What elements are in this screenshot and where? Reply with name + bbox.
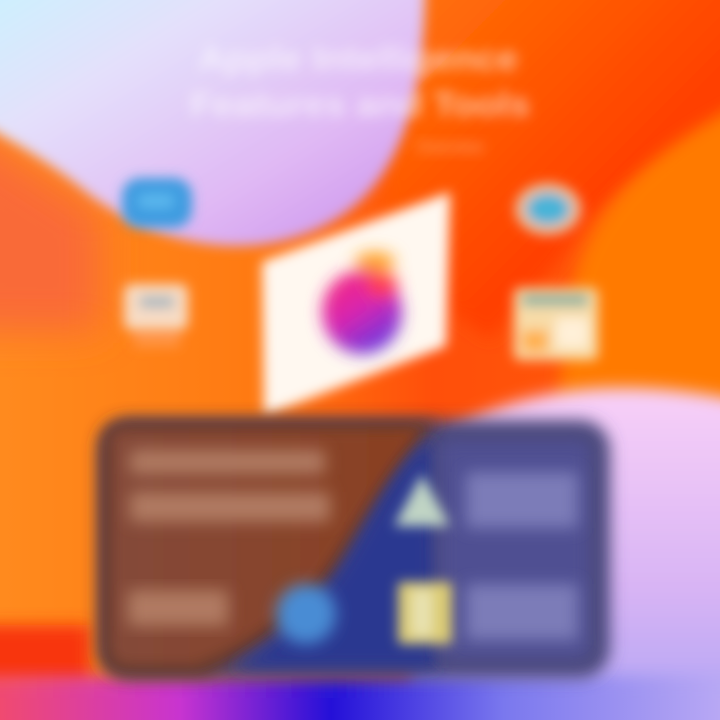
icon: yellow document (398, 582, 452, 644)
decorative shape: pink wave bottom right (410, 388, 720, 712)
title: Features and Tools (190, 86, 530, 124)
panel block: left bottom text (128, 590, 228, 626)
panel block: right bottom text (466, 584, 578, 640)
panel block: right top text (466, 472, 578, 528)
subtitle: Overview (417, 139, 484, 156)
icon: blue globe (276, 584, 336, 644)
decorative shape: orange circle right (555, 95, 720, 420)
icon: triangle (394, 474, 450, 526)
icon: blue chat top left (122, 178, 192, 228)
title: Apple Intelligence (198, 40, 518, 78)
icon: apple logo (322, 252, 402, 354)
bottom panel (100, 420, 610, 678)
panel block: left top text (130, 450, 330, 522)
icon: teal badge top right (515, 183, 581, 235)
central white card with apple icon (262, 192, 450, 416)
decorative shape: lilac circle top left (0, 0, 425, 246)
bottom gradient strip (0, 676, 720, 720)
title (190, 40, 530, 124)
icon: calendar card right (514, 288, 598, 360)
icon: small card left (124, 284, 188, 346)
